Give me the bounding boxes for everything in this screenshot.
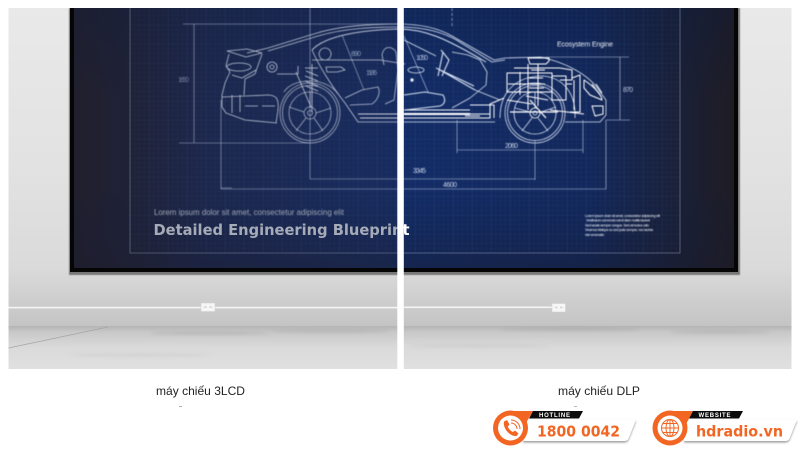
wire and outlet, left [8, 303, 398, 312]
heading: Ecosystem Engine: Ecosystem Engine [557, 42, 613, 48]
black tab [529, 411, 583, 418]
poster title: Detailed Engineering Blueprint [154, 221, 410, 239]
badge: website: WEBSITE [698, 413, 730, 419]
hotline number: 1800 0042 [537, 422, 620, 440]
label: DLP projector: máy chiếu DLP [558, 384, 640, 398]
poster paragraph: Lorem ipsum dolor sit amet, consectetur adipiscing elit [585, 214, 660, 218]
badge: hotline [493, 410, 636, 446]
website address: hdradio.vn [696, 422, 783, 440]
poster paragraph: nisl venenatis [585, 233, 604, 237]
badge: website [652, 410, 797, 446]
small mark, right [574, 405, 577, 408]
diagram: car blueprint [179, 8, 630, 189]
rear suspension [296, 64, 318, 112]
badge body [684, 420, 797, 441]
label 870: 870 [623, 87, 633, 94]
panel: wall screen [69, 8, 740, 275]
dimension labels [178, 51, 633, 189]
rear wheel [280, 81, 340, 143]
circle icon: phone [493, 410, 528, 446]
poster paragraph: Sed iaculis semper congue. Sed vel luctus odio [585, 223, 649, 227]
panel: room background [8, 8, 792, 369]
poster caption: Lorem ipsum dolor sit amet, consectetur adipiscing elit [154, 207, 345, 217]
label 3345: 3345 [413, 168, 426, 175]
badge body [523, 420, 636, 441]
orange wedge [671, 411, 693, 440]
orange wedge [510, 411, 533, 440]
wire and outlet, right [404, 304, 566, 312]
poster paragraph [585, 214, 660, 237]
label 890: 890 [351, 51, 361, 58]
label 2060: 2060 [505, 143, 518, 150]
badge: hotline: HOTLINE [539, 413, 570, 419]
label 1186: 1186 [366, 70, 377, 77]
top white margin [0, 0, 800, 8]
label: 3LCD projector: máy chiếu 3LCD [156, 384, 245, 398]
circle icon: globe [652, 410, 688, 446]
cabin and seats [312, 48, 495, 122]
front wheel [505, 83, 565, 143]
label 4600: 4600 [443, 182, 457, 189]
engine bay [480, 58, 603, 118]
label 1050: 1050 [416, 55, 428, 62]
small mark, left [179, 405, 182, 408]
black tab [689, 411, 743, 418]
label 1650: 1650 [178, 77, 189, 84]
sill [358, 105, 494, 118]
dim overlay on the 3LCD half [74, 8, 397, 268]
floor [8, 326, 792, 369]
body outline [227, 24, 606, 122]
poster paragraph: Vestibulum commodo est id diam mattis laoreet [586, 219, 650, 223]
dimension lines [179, 8, 630, 189]
divider between the two projectors [397, 0, 404, 370]
poster paragraph: Vivamus tristique eu sed justo semper, nec lacinia [585, 228, 653, 232]
